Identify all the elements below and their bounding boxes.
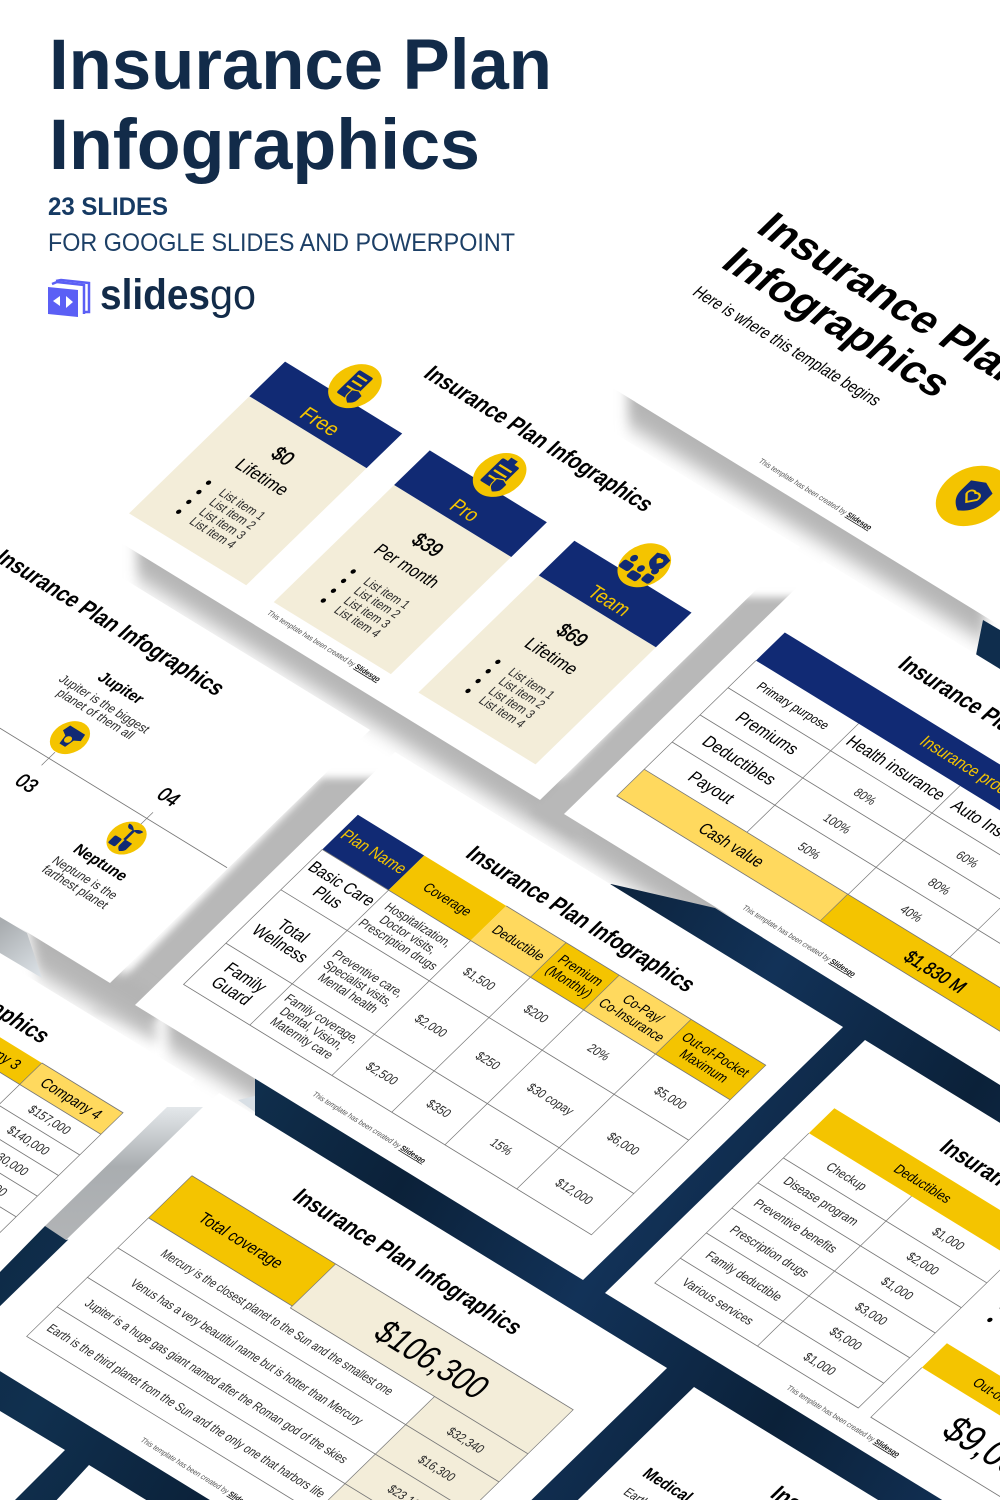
- deductibles rows: $1,000: [800, 1350, 840, 1378]
- row labels: Premiums: [731, 708, 804, 758]
- deductibles rows: Preventive benefits: [750, 1196, 841, 1256]
- row: basic care plus: Basic Care: [304, 858, 380, 910]
- deductibles credit: This template has been created by Slidesgo: [784, 1383, 903, 1459]
- bullet list: [986, 1305, 1000, 1323]
- plan card: pro: [274, 420, 578, 674]
- header row: Plan Name: [336, 827, 411, 878]
- plan period: Lifetime: [231, 455, 294, 499]
- navy background: [0, 620, 1000, 1500]
- plan list: List item 3: [340, 594, 394, 631]
- cover title: [712, 205, 1000, 431]
- row: family guard: 15%: [486, 1136, 516, 1158]
- header row: Coverage: [419, 880, 476, 919]
- row: total wellness: Wellness: [247, 921, 313, 967]
- icon: clipboard with shield: [462, 445, 538, 505]
- icon: stacked slides: [48, 280, 89, 317]
- plan list: List item 1: [215, 486, 269, 523]
- health insurance column: Health insurance: [842, 732, 950, 804]
- health insurance column: 100%: [820, 811, 855, 837]
- products table: [617, 632, 1000, 1046]
- row labels: Cash value: [694, 819, 769, 871]
- coverage rows: Venus has a very beautiful name but is hotter than Mercury: [127, 1276, 367, 1428]
- plan price: $39: [406, 529, 448, 561]
- row labels: Deductibles: [698, 732, 781, 789]
- comparison table: [184, 815, 766, 1235]
- slide: deductibles: [605, 1040, 1000, 1500]
- plan list: List item 4: [186, 515, 240, 552]
- header row: Co-Insurance: [595, 995, 668, 1045]
- plan name: Free: [294, 403, 345, 441]
- neptune text: [39, 837, 139, 912]
- plan card: free: [129, 332, 433, 585]
- timeline axis: [0, 587, 233, 875]
- auto insurance column: 60%: [952, 848, 982, 871]
- deductibles rows: [673, 1147, 968, 1378]
- wordmark: slidesgo: [100, 271, 256, 319]
- header row: Maximum: [676, 1047, 732, 1085]
- main heading: Insurance Plan: [49, 26, 552, 105]
- row: family guard: Guard: [207, 973, 257, 1009]
- jupiter text: Jupiter: [93, 669, 148, 708]
- row: basic care plus: 20%: [584, 1041, 614, 1063]
- coverage rows: [43, 1233, 490, 1500]
- slide count: 23 SLIDES: [48, 193, 168, 221]
- cash value amount: $1,830 M: [899, 947, 971, 997]
- plan period: Lifetime: [520, 634, 584, 678]
- slide: insurance products table: [564, 561, 1000, 1089]
- company 4 column: $140,000: [3, 1123, 53, 1158]
- plan list: [171, 477, 269, 552]
- header row: Out-of-Pocket: [678, 1030, 753, 1080]
- plan list: List item 4: [331, 603, 384, 640]
- row: family guard: $12,000: [552, 1176, 597, 1207]
- out of pocket box: [871, 1343, 1000, 1500]
- plan price: $0: [266, 443, 300, 470]
- jupiter text: planet of them all: [53, 686, 138, 742]
- slide: lower left partial: [40, 1465, 300, 1500]
- icon: team with shield: [606, 535, 682, 595]
- row: total wellness: Specialist visits,: [320, 958, 397, 1009]
- plan list: List item 2: [206, 495, 259, 532]
- plan price: $69: [551, 620, 593, 652]
- slide: cover: [585, 118, 1000, 646]
- company 4 column: [0, 1076, 106, 1205]
- slide: total coverage: [0, 1093, 667, 1500]
- plan name: Team: [582, 581, 636, 621]
- icon: shield with heart: [921, 454, 1000, 537]
- auto insurance column: 40%: [896, 903, 926, 925]
- plan list: List item 4: [475, 694, 529, 731]
- plan name: Pro: [444, 495, 485, 526]
- deductibles rows: $5,000: [826, 1325, 866, 1353]
- row: family guard: Family: [220, 959, 272, 996]
- row: basic care plus: Prescription drugs: [355, 916, 441, 973]
- row: basic care plus: Doctor visits,: [376, 913, 440, 956]
- slide: company table: [0, 804, 195, 1332]
- deductibles rows: Various services: [679, 1275, 757, 1328]
- row: total wellness: Mental health: [315, 971, 382, 1016]
- plan list: List item 1: [505, 665, 558, 702]
- row: family guard: $2,500: [362, 1060, 402, 1088]
- main heading: Infographics: [49, 106, 480, 185]
- header row: (Monthly): [542, 963, 596, 1001]
- company 4 column: $157,000: [25, 1103, 75, 1137]
- comparison credit: This template has been created by Slidesgo: [310, 1090, 429, 1165]
- plan list: List item 1: [360, 575, 414, 612]
- neptune text: farthest planet: [39, 863, 113, 912]
- plan list: List item 3: [485, 684, 539, 721]
- plan list: List item 3: [196, 505, 249, 542]
- total amount: $106,300: [365, 1314, 498, 1406]
- header row: Premium: [554, 952, 607, 989]
- main heading: [49, 26, 552, 185]
- row: total wellness: Total: [272, 916, 314, 946]
- row: family guard: Dental, Vision,: [276, 1005, 347, 1052]
- health insurance column: 80%: [850, 786, 880, 808]
- row: total wellness: $2,000: [411, 1012, 451, 1040]
- auto insurance column: 80%: [924, 875, 954, 898]
- deductibles rows: $1,000: [928, 1225, 968, 1253]
- deductibles header: Deductibles: [890, 1162, 956, 1206]
- header row: Deductible: [488, 922, 549, 964]
- deductibles rows: Prescription drugs: [726, 1223, 813, 1280]
- coverage table: [26, 1176, 573, 1500]
- cover credit: This template has been created by Slidesgo: [756, 457, 875, 532]
- header row: [330, 822, 754, 1091]
- number 03: 03: [10, 770, 43, 797]
- row: total wellness: [244, 908, 652, 1169]
- coverage rows: Jupiter is a huge gas giant named after the Roman god of the skies: [81, 1297, 351, 1466]
- jupiter text: [46, 655, 171, 746]
- icon: neptune marker: [98, 815, 155, 861]
- row: basic care plus: Hospitalization,: [381, 900, 455, 950]
- deductibles rows: $1,000: [877, 1274, 917, 1303]
- plan period: Per month: [369, 540, 445, 592]
- coverage title: Insurance Plan Infographics: [287, 1184, 529, 1339]
- slide: medical: [434, 1387, 1000, 1500]
- plan list: List item 2: [495, 675, 549, 711]
- row labels: Primary purpose: [753, 679, 833, 732]
- row: basic care plus: [289, 856, 702, 1121]
- cover subtitle: Here is where this template begins: [688, 283, 886, 410]
- pricing title: Insurance Plan Infographics: [418, 361, 660, 516]
- icon: jupiter marker: [42, 715, 98, 760]
- icon: document with shield: [317, 356, 393, 416]
- row: total wellness: $30 copay: [523, 1081, 578, 1118]
- comparison title: Insurance Plan Infographics: [460, 841, 702, 997]
- slide: pricing plans: [92, 272, 800, 800]
- number 04: 04: [151, 784, 185, 811]
- row: family guard: Family coverage,: [281, 991, 363, 1046]
- plan list: List item 2: [350, 584, 404, 621]
- row: basic care plus: Plus: [308, 882, 348, 912]
- row labels: [640, 679, 879, 871]
- neptune text: Neptune: [69, 841, 132, 885]
- deductibles rows: $3,000: [851, 1300, 891, 1328]
- company table: [0, 1013, 123, 1258]
- coverage rows: Mercury is the closest planet to the Sun and the smallest one: [157, 1247, 397, 1398]
- plan list: [460, 656, 558, 731]
- plan card: team: [418, 511, 722, 764]
- slide: timeline: [0, 455, 370, 983]
- jupiter text: Jupiter is the biggest: [56, 672, 154, 736]
- row labels: Payout: [683, 768, 740, 808]
- pricing credit: This template has been created by Slidesgo: [265, 608, 383, 684]
- slidesgo logo: [48, 271, 256, 319]
- auto insurance column: [862, 796, 1000, 947]
- row: basic care plus: $5,000: [651, 1084, 690, 1112]
- row: total wellness: $6,000: [603, 1130, 643, 1158]
- plan list: [316, 566, 414, 640]
- slide: plan comparison table: [135, 752, 843, 1280]
- slide: far left partial: [0, 1375, 65, 1500]
- company 4 column: Company 4: [36, 1076, 106, 1123]
- row: basic care plus: $1,500: [459, 965, 499, 993]
- deductibles table: [655, 1108, 1000, 1408]
- row: family guard: $350: [423, 1097, 455, 1120]
- coverage rows: $32,340: [443, 1425, 488, 1456]
- header row: Co-Pay/: [619, 992, 668, 1026]
- deductibles rows: $2,000: [903, 1250, 943, 1278]
- total coverage label: Total coverage: [194, 1210, 287, 1272]
- deductibles rows: Checkup: [823, 1160, 871, 1193]
- row: total wellness: Preventive care,: [329, 948, 407, 1000]
- row: family guard: Maternity care: [267, 1015, 337, 1062]
- products credit: This template has been created by Slidesgo: [740, 903, 859, 978]
- neptune text: Neptune is the: [49, 854, 121, 902]
- deductibles rows: Disease program: [780, 1174, 862, 1228]
- platforms line: FOR GOOGLE SLIDES AND POWERPOINT: [48, 229, 515, 257]
- coverage rows: $16,300: [414, 1453, 459, 1484]
- row: family guard: [205, 957, 608, 1216]
- deductibles rows: Family deductible: [702, 1249, 786, 1304]
- row: total wellness: $250: [472, 1049, 504, 1073]
- health insurance column: 50%: [794, 840, 824, 862]
- cover title: Insurance Plan: [747, 205, 1000, 397]
- health insurance column: [758, 732, 950, 886]
- cover title: Infographics: [712, 239, 962, 405]
- row: basic care plus: $200: [520, 1002, 552, 1026]
- background shadows between slides: [0, 372, 985, 1240]
